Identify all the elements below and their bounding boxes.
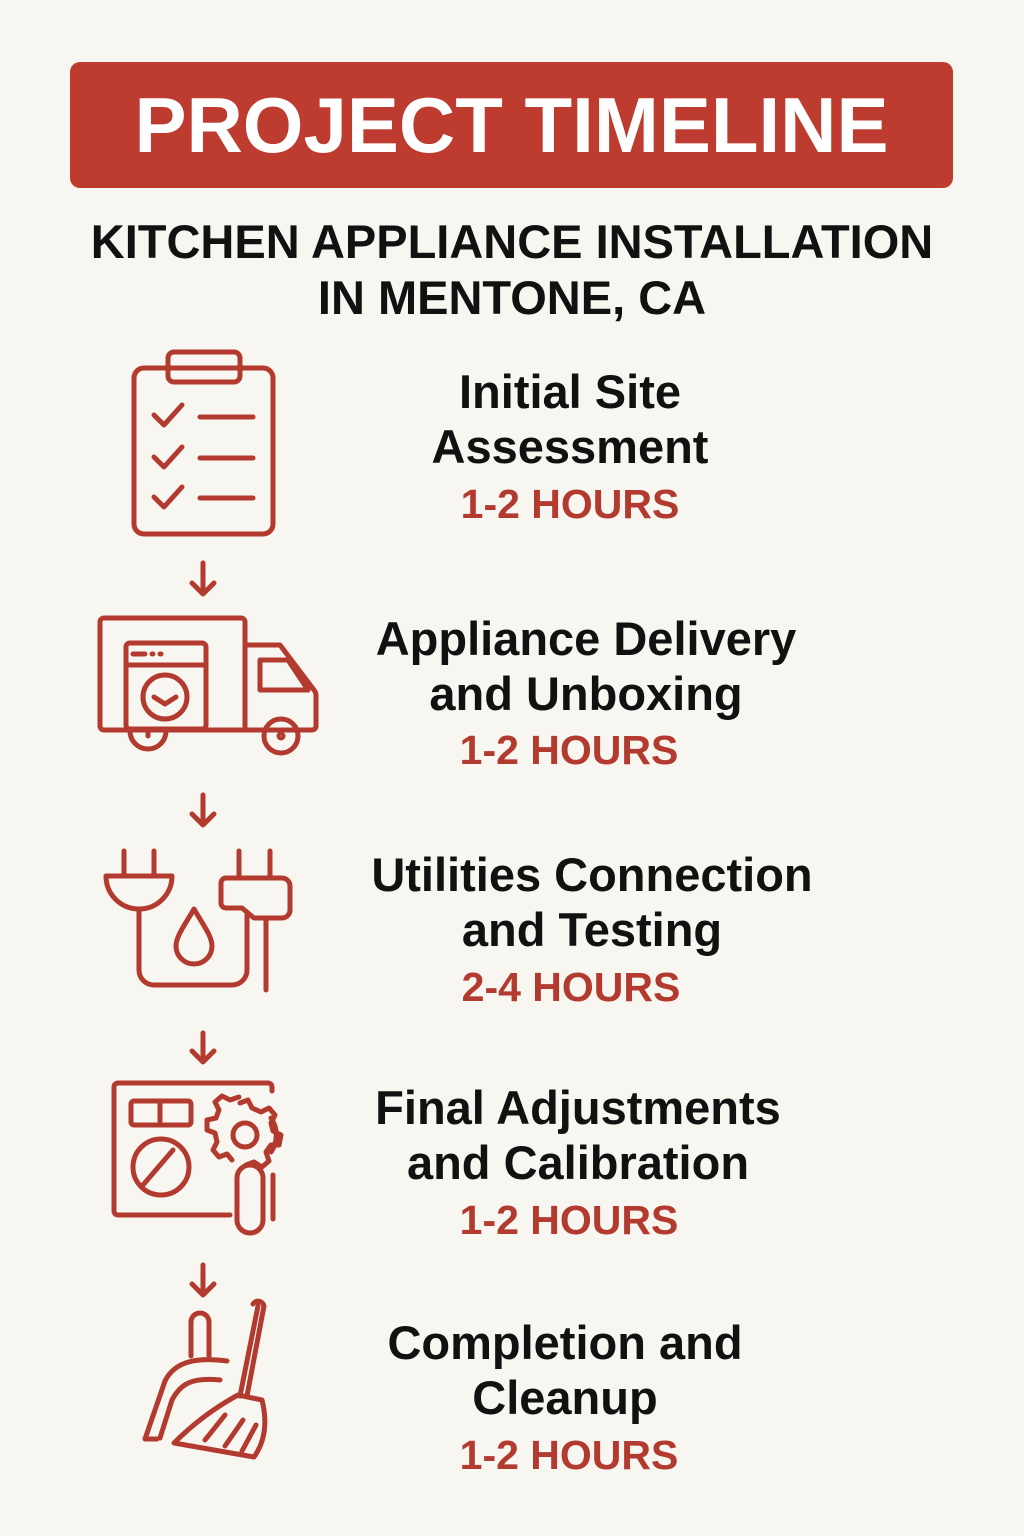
arrow 3	[192, 1033, 214, 1062]
step 4 heading: Final Adjustments	[375, 1081, 781, 1134]
step 4 text	[375, 1081, 781, 1243]
title banner	[70, 62, 953, 188]
icon: adjustments	[114, 1083, 281, 1233]
arrow 2	[192, 795, 214, 825]
arrow 1	[192, 563, 214, 594]
step 1 duration: 1-2 HOURS	[461, 481, 679, 527]
step 3 duration: 2-4 HOURS	[462, 964, 680, 1010]
title banner: PROJECT TIMELINE	[134, 81, 889, 169]
icon: dustpan and broom	[145, 1301, 265, 1457]
step 5 text	[387, 1316, 743, 1478]
step 2 duration: 1-2 HOURS	[460, 727, 678, 773]
step 4 heading: and Calibration	[407, 1136, 749, 1189]
step 3 heading: Utilities Connection	[371, 848, 813, 901]
icon: delivery truck	[100, 618, 316, 753]
step 2 heading	[376, 612, 796, 720]
step 2 heading: Appliance Delivery	[376, 612, 796, 665]
icon: clipboard	[134, 352, 273, 534]
step 1 heading: Assessment	[432, 420, 708, 473]
step 5 duration: 1-2 HOURS	[460, 1432, 678, 1478]
step 5 heading	[387, 1316, 743, 1424]
step 3 heading: and Testing	[462, 903, 722, 956]
step 1 heading: Initial Site	[459, 365, 681, 418]
subtitle: KITCHEN APPLIANCE INSTALLATION	[91, 215, 933, 268]
step 1 text	[432, 365, 708, 527]
step 2 heading: and Unboxing	[429, 667, 743, 720]
step 3 text	[371, 848, 813, 1010]
subtitle: IN MENTONE, CA	[318, 271, 706, 324]
step 1 heading	[432, 365, 708, 473]
arrow 4	[192, 1265, 214, 1295]
subtitle	[91, 215, 933, 324]
step 4 duration: 1-2 HOURS	[460, 1197, 678, 1243]
step 2 text	[376, 612, 796, 773]
step 5 heading: Cleanup	[472, 1371, 658, 1424]
step 5 heading: Completion and	[387, 1316, 743, 1369]
step 3 heading	[371, 848, 813, 956]
step 4 heading	[375, 1081, 781, 1189]
icon: utilities plugs and water	[106, 851, 290, 990]
